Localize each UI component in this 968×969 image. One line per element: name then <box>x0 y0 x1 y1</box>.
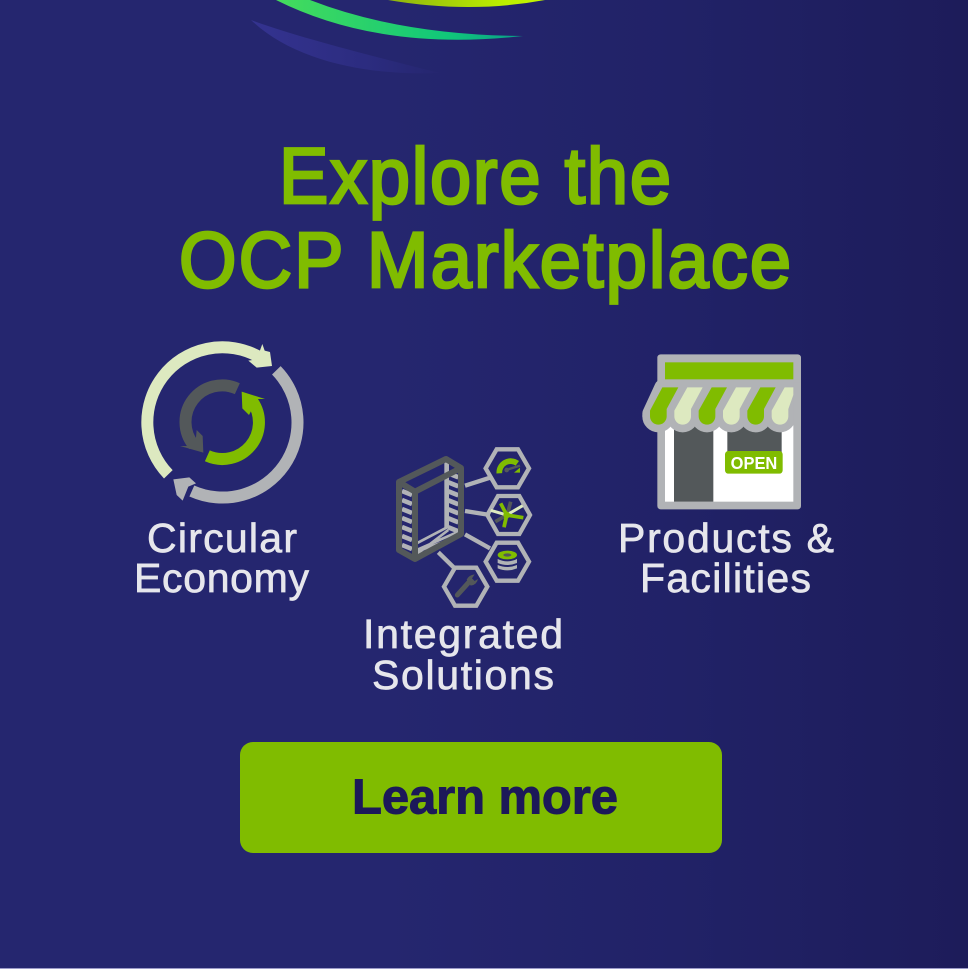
icon: integrated solutions rack with hexagons <box>399 449 530 606</box>
hexagons <box>444 449 530 606</box>
label: products and facilities <box>618 515 834 601</box>
label: integrated solutions: Solutions <box>372 652 554 698</box>
store frame <box>657 354 801 509</box>
wrench <box>457 582 469 595</box>
button: learn more <box>240 742 722 853</box>
awning stripes <box>650 387 793 425</box>
gauge <box>499 461 517 473</box>
window <box>727 425 782 453</box>
title <box>179 133 791 304</box>
database <box>498 551 517 559</box>
title: Explore the <box>279 133 671 220</box>
rack frame <box>399 459 461 559</box>
open sign: OPEN <box>731 453 777 473</box>
awning outline <box>650 387 793 425</box>
label: integrated solutions <box>363 611 563 698</box>
connector lines <box>438 478 490 568</box>
shop front <box>665 425 793 502</box>
label: circular economy <box>134 515 310 601</box>
sign board <box>665 362 793 379</box>
label: products and facilities: Products & <box>618 515 834 561</box>
label: circular economy: Economy <box>134 555 310 601</box>
button: learn more: Learn more <box>352 770 618 824</box>
decorative top swooshes <box>251 0 545 73</box>
label: integrated solutions: Integrated <box>363 611 563 657</box>
door <box>674 425 713 502</box>
label: products and facilities: Facilities <box>640 555 811 601</box>
label: circular economy: Circular <box>147 515 297 561</box>
icon: circular economy arrows <box>147 344 298 501</box>
fan <box>491 502 523 528</box>
title: OCP Marketplace <box>179 217 791 304</box>
icon: storefront <box>650 354 801 509</box>
rack shelves <box>402 462 458 554</box>
